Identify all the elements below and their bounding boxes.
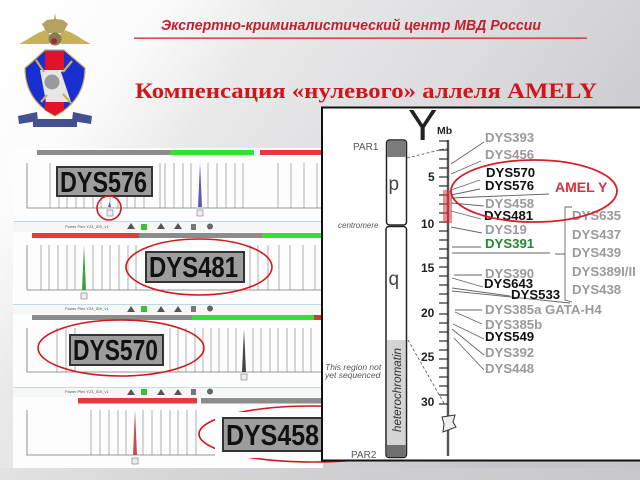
Mb ruler: 30 [421,395,435,409]
toolbar 3 [13,387,322,397]
Mb ruler: 10 [421,217,435,231]
marker labels: DYS389I/II [572,264,636,279]
AMEL Y callout [451,160,617,222]
marker labels: DYS456 [485,147,534,162]
chromosome p arm: p [388,174,399,195]
header rule [134,38,587,39]
ribbon motto [18,112,92,127]
left annotations: PAR1 [353,142,379,153]
marker labels: GATA-H4 [545,302,602,317]
toolbar 2: Power Plex Y23_IDX_v1 [65,306,110,311]
left annotations: centromere [338,221,379,230]
eagle wings [19,30,91,44]
toolbar 3: Power Plex Y23_IDX_v1 [65,389,110,394]
highlight ellipse [38,320,204,376]
label plate DYS481: DYS481 [149,252,238,284]
marker labels: DYS437 [572,227,621,242]
header organisation line: Экспертно-криминалистический центр МВД России [161,18,541,34]
marker labels: DYS393 [485,130,534,145]
Mb ruler: 15 [421,261,435,275]
shield white scroll band [40,70,71,102]
left annotations: yet sequenced [324,370,381,380]
chromosome q arm: q [388,269,399,290]
bottom background strip [0,468,640,480]
Mb ruler: 25 [421,350,435,364]
highlight circle [97,196,121,220]
label plate DYS570: DYS570 [73,335,158,367]
marker labels: DYS439 [572,245,621,260]
bracket [555,207,572,302]
marker labels: DYS391 [485,236,534,251]
Mb ruler: 20 [421,306,435,320]
toolbar 1 [13,221,322,232]
label plate DYS458: DYS458 [226,420,319,452]
label plate DYS458 [215,412,323,458]
marker labels: DYS570 [486,165,535,180]
Mb ruler: 5 [428,170,435,184]
toolbar 2 [13,304,322,314]
Mb label: Mb [437,125,452,137]
chromosome p arm [386,140,406,225]
marker labels [484,130,636,376]
toolbar 1: Power Plex Y23_IDX_v1 [65,224,110,229]
marker labels: DYS533 [511,287,560,302]
icon: police emblem [18,13,92,127]
dashed guides [407,148,448,405]
marker labels: DYS390 [485,266,534,281]
marker labels: DYS385b [485,317,542,332]
marker leader lines [451,142,570,370]
panel: Y chromosome map [322,101,640,461]
panel background [13,148,323,468]
marker labels: DYS385a [485,302,542,317]
marker labels: DYS635 [572,208,621,223]
chart: DYS481 trace [27,233,322,299]
marker labels: DYS392 [485,345,534,360]
AMEL Y callout: AMEL Y [555,179,608,195]
red AMEL region [443,190,452,223]
left annotations [324,142,382,461]
marker labels: DYS549 [485,329,534,344]
panel: electropherograms [13,148,425,468]
chart: DYS576 trace [27,150,322,220]
Mb ruler [421,140,456,456]
Y heading: Y [408,101,437,150]
marker labels: DYS643 [484,276,533,291]
chart: DYS458 trace [27,398,425,464]
chart: DYS570 trace [27,315,322,380]
marker labels: DYS19 [485,222,527,237]
marker labels: DYS448 [485,361,534,376]
marker labels: DYS438 [572,282,621,297]
marker labels: DYS458 [485,196,534,211]
label plate DYS576: DYS576 [60,167,147,199]
shield red stripe [45,51,64,116]
chromosome q arm [386,226,406,458]
map frame [322,108,640,460]
left annotations: PAR2 [351,450,377,461]
chromosome q arm: heterochromatin [390,348,404,432]
marker labels: DYS481 [484,208,533,223]
swords [36,60,72,103]
title: Компенсация «нулевого» аллеля AMELY [135,78,597,103]
marker labels: DYS576 [485,178,534,193]
left annotations: This region not [325,362,382,372]
eagle crown [42,13,68,33]
shield [25,50,85,116]
highlight ellipse [126,239,272,295]
highlight ellipse [199,406,425,462]
